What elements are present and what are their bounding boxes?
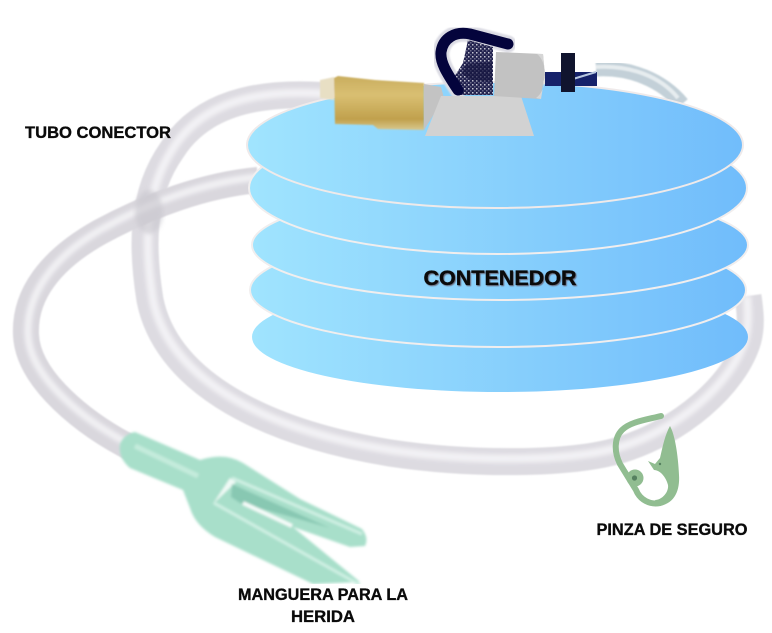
container disc 4 (250, 233, 746, 347)
label: CONTENEDOR: CONTENEDOR (424, 268, 578, 291)
tube crossing shadow (135, 190, 163, 234)
tube: right end to top of container (596, 67, 682, 104)
container disc 2 (249, 122, 747, 254)
valve cylinder (494, 52, 545, 99)
label: MANGUERA PARA LA HERIDA (238, 586, 408, 626)
icon: green Y wound connector (120, 432, 366, 585)
stem collar (561, 53, 575, 92)
dark blue stem (545, 72, 597, 86)
panel: container (247, 82, 748, 392)
icon: green safety clamp (616, 416, 679, 506)
tube: wound hose loop (26, 177, 258, 450)
label: PINZA DE SEGURO: PINZA DE SEGURO (596, 521, 748, 539)
valve assembly (320, 33, 597, 136)
valve trapezoid stand (425, 96, 534, 136)
label: MANGUERA PARA LA HERIDA: MANGUERA PARA LA (238, 586, 408, 604)
label: CONTENEDOR: CONTENEDOR (424, 267, 576, 290)
tube: connector tube main loop (145, 93, 750, 462)
icon: gold connector (320, 76, 424, 130)
container disc 3 (252, 190, 748, 300)
container disc 5 (252, 282, 748, 392)
label: TUBO CONECTOR: TUBO CONECTOR (25, 124, 171, 142)
container disc 1 (247, 82, 743, 208)
valve base (424, 84, 444, 130)
icon: dark pump handle (441, 33, 508, 95)
label: MANGUERA PARA LA HERIDA: HERIDA (291, 608, 355, 626)
